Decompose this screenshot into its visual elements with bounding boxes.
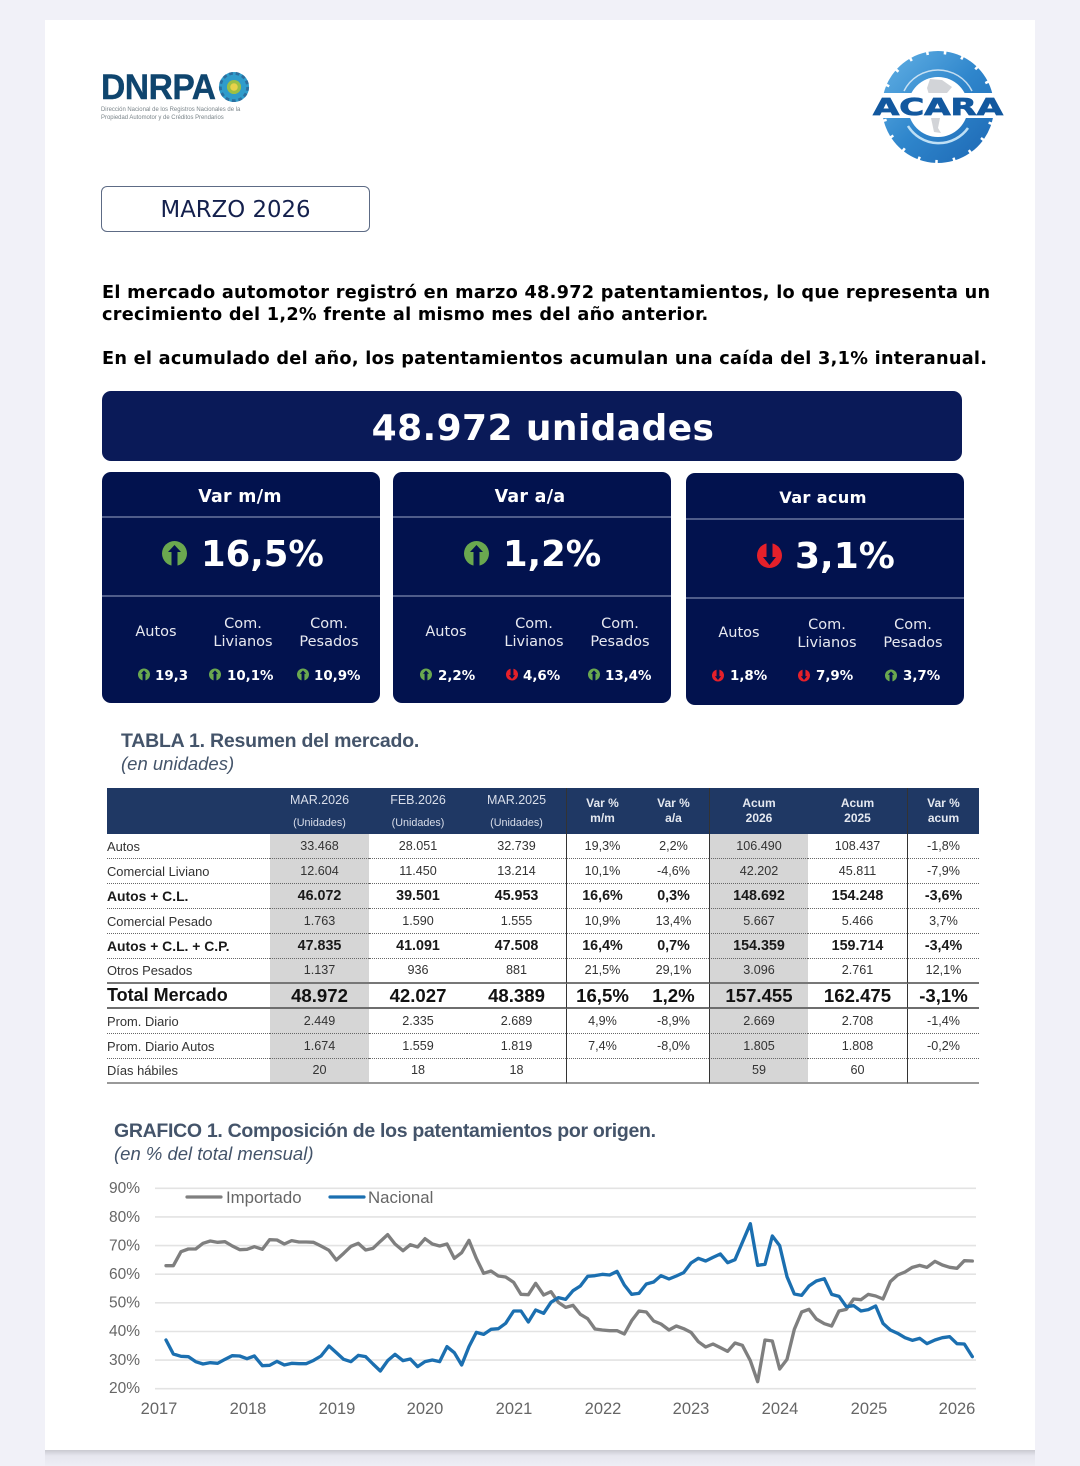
legend (187, 1188, 433, 1207)
row: Otros Pesados: 1.137 (304, 963, 335, 977)
table header: 2025 (844, 811, 871, 825)
row: Autos + C.L.: 0,3% (657, 888, 690, 904)
row: Autos + C.L. + C.P.: -3,4% (925, 938, 962, 954)
icon: up (297, 668, 309, 680)
x axis labels: 2025 (851, 1400, 887, 1418)
row: Autos + C.L.: 148.692 (733, 888, 785, 904)
row: Total Mercado: 48.389 (488, 985, 545, 1006)
main value: 3,1% (795, 536, 895, 577)
label: Autos: Autos (425, 624, 467, 640)
row: Comercial Liviano: Comercial Liviano (107, 864, 209, 878)
table header: Var % (927, 796, 960, 810)
logo: DNRPA (101, 68, 250, 121)
row: Total Mercado: 1,2% (652, 985, 695, 1006)
row: Prom. Diario Autos: 1.674 (304, 1038, 335, 1052)
row: Prom. Diario Autos: -8,0% (657, 1038, 690, 1052)
label: Com. Livianos: Livianos (504, 634, 564, 650)
intro paragraph: El mercado automotor registró en marzo 48.972 patentamientos, lo que representa un (102, 283, 990, 303)
row: Otros Pesados: 881 (506, 963, 527, 977)
row: Autos + C.L. + C.P.: Autos + C.L. + C.P. (107, 938, 229, 954)
value: livianos: 10,1% (227, 669, 273, 684)
row: Otros Pesados: 3.096 (743, 963, 775, 977)
table header: (Unidades) (293, 817, 346, 829)
x axis labels: 2020 (407, 1400, 443, 1418)
row: Otros Pesados: 2.761 (842, 963, 873, 977)
icon: up (138, 668, 150, 680)
table header: acum (928, 811, 959, 825)
banner: total units (102, 391, 962, 461)
row: Autos + C.L.: -3,6% (925, 888, 962, 904)
logo: ACARA (872, 51, 1004, 163)
value: livianos: 7,9% (816, 669, 853, 684)
main value: 16,5% (201, 534, 324, 575)
label: Com. Pesados (883, 617, 943, 650)
subheading: chart: (en % del total mensual) (114, 1143, 314, 1164)
label: Autos: Autos (135, 624, 177, 640)
row: Comercial Liviano: 11.450 (399, 864, 437, 878)
heading: chart: GRAFICO 1. Composición de los patentamientos por origen. (114, 1120, 656, 1142)
row: Prom. Diario: 2.449 (304, 1014, 335, 1028)
x axis labels (141, 1400, 975, 1418)
row: Autos: 33.468 (300, 838, 339, 852)
row: Días hábiles (107, 1059, 979, 1084)
row: Autos: 32.739 (497, 838, 536, 852)
main value icon (464, 541, 489, 566)
row: Autos (107, 834, 979, 859)
y axis labels: 70% (109, 1238, 140, 1254)
row: Autos: 106.490 (736, 838, 782, 852)
card heading: Var m/m (198, 487, 282, 507)
row: Prom. Diario Autos: 7,4% (588, 1038, 617, 1052)
row: Prom. Diario: Prom. Diario (107, 1014, 179, 1028)
table header: MAR.2025 (487, 793, 546, 807)
row: Autos + C.L.: 16,6% (582, 888, 623, 904)
row: Autos: 28.051 (399, 838, 437, 852)
row: Días hábiles: 59 (752, 1063, 766, 1077)
logo: DNRPA: Propiedad Automotor y de Créditos Prendarios (101, 115, 224, 121)
card heading: Var a/a (495, 487, 565, 507)
series: Nacional (166, 1224, 972, 1371)
row: Prom. Diario: 2.689 (501, 1014, 532, 1028)
row: Comercial Pesado: 3,7% (929, 914, 958, 928)
value: autos: 19,3 (155, 669, 188, 684)
label: Com. Livianos: Livianos (797, 634, 857, 650)
row: Comercial Liviano (107, 859, 979, 884)
table header: Var % (586, 796, 619, 810)
table header: a/a (665, 811, 682, 825)
y axis labels: 20% (109, 1380, 140, 1397)
x axis labels: 2022 (585, 1400, 621, 1418)
label: Com. Pesados: Com. (894, 617, 932, 633)
row: Días hábiles: 20 (312, 1063, 326, 1077)
label: Autos: Autos (718, 625, 760, 641)
value: autos: 2,2% (438, 669, 475, 684)
table header (107, 788, 979, 1084)
row: Autos + C.L. + C.P.: 159.714 (832, 938, 883, 954)
value: pesados: 10,9% (314, 669, 360, 684)
row: Autos + C.L. + C.P.: 16,4% (582, 938, 623, 954)
row: Prom. Diario Autos: 1.559 (402, 1038, 434, 1052)
row: Autos + C.L. + C.P.: 47.835 (298, 938, 341, 954)
row: Comercial Pesado (107, 909, 979, 934)
row: Comercial Liviano: -7,9% (927, 864, 960, 878)
row: Comercial Liviano: 13.214 (497, 864, 536, 878)
row: Prom. Diario Autos: 1.819 (501, 1038, 532, 1052)
table header: Acum (742, 796, 776, 810)
row: Días hábiles: 60 (850, 1063, 864, 1077)
row: Otros Pesados: Otros Pesados (107, 963, 192, 978)
row: Autos: 2,2% (659, 838, 688, 852)
table header: FEB.2026 (390, 793, 446, 807)
row: Autos: 19,3% (585, 838, 620, 852)
y axis labels: 80% (109, 1209, 140, 1226)
row: Comercial Pesado: 1.555 (501, 914, 532, 928)
table header: Acum (841, 796, 874, 810)
row: Comercial Liviano: 10,1% (585, 864, 620, 878)
label: Com. Pesados (299, 616, 359, 650)
row: Prom. Diario (107, 1009, 979, 1034)
table header: (Unidades) (490, 817, 543, 829)
row: Prom. Diario: -8,9% (657, 1014, 690, 1028)
x axis labels: 2018 (230, 1400, 266, 1418)
value: livianos: 4,6% (523, 669, 560, 684)
main value icon (757, 544, 782, 568)
y axis labels: 90% (109, 1180, 140, 1197)
icon: down (798, 670, 810, 682)
label: Com. Livianos: Livianos (213, 634, 273, 650)
row: Otros Pesados: 21,5% (585, 963, 620, 977)
row: Autos + C.L.: 39.501 (396, 888, 440, 904)
row: Comercial Pesado: 5.466 (842, 914, 873, 928)
label: Com. Livianos: Com. (224, 616, 262, 632)
row: Comercial Pesado: Comercial Pesado (107, 914, 212, 928)
heading: table: TABLA 1. Resumen del mercado. (121, 730, 419, 752)
row: Comercial Pesado: 1.763 (304, 914, 335, 928)
icon: up (209, 668, 221, 680)
panel: Var a/a (393, 472, 671, 703)
date badge: MARZO 2026 (161, 197, 310, 223)
row: Autos + C.L. + C.P.: 0,7% (657, 938, 690, 954)
line chart: origin share (109, 1180, 976, 1418)
card heading: Var acum (779, 488, 867, 507)
row: Prom. Diario Autos: 1.808 (842, 1038, 873, 1052)
icon: up (588, 668, 600, 680)
label: Com. Pesados: Com. (310, 616, 348, 632)
legend: Nacional (368, 1188, 433, 1207)
x axis labels: 2024 (762, 1400, 798, 1418)
intro paragraph (102, 283, 990, 325)
row: Total Mercado: 42.027 (390, 985, 446, 1006)
row: Días hábiles: Días hábiles (107, 1063, 178, 1078)
icon: down (506, 668, 518, 680)
label: Com. Pesados: Pesados (590, 634, 650, 650)
row: Otros Pesados: 29,1% (656, 963, 691, 977)
logo: DNRPA: Dirección Nacional de los Registros Nacionales de la (101, 107, 240, 113)
table header: 2026 (746, 811, 772, 825)
y axis labels: 40% (109, 1323, 140, 1340)
row: Comercial Pesado: 10,9% (585, 914, 620, 928)
label: Com. Pesados: Com. (601, 616, 639, 632)
row: Comercial Pesado: 13,4% (656, 914, 691, 928)
row: Comercial Pesado: 1.590 (402, 914, 434, 928)
row: Otros Pesados: 936 (407, 963, 428, 977)
icon: down (712, 670, 724, 682)
value: pesados: 3,7% (903, 669, 940, 684)
row: Autos + C.L. + C.P.: 154.359 (733, 938, 785, 954)
y axis labels: 30% (109, 1352, 140, 1369)
panel: Var acum (686, 473, 964, 705)
table header: (Unidades) (392, 817, 444, 829)
row: Prom. Diario Autos: 1.805 (743, 1038, 775, 1052)
row: Total Mercado: Total Mercado (107, 985, 228, 1005)
value: pesados: 13,4% (605, 669, 651, 684)
row: Días hábiles: 18 (411, 1063, 425, 1077)
row: Autos + C.L. + C.P.: 47.508 (495, 938, 538, 954)
row: Total Mercado: 48.972 (291, 985, 348, 1006)
row: Total Mercado: 157.455 (725, 985, 793, 1006)
row: Total Mercado: 16,5% (576, 985, 629, 1006)
row: Comercial Liviano: 45.811 (839, 864, 876, 878)
value: autos: 1,8% (730, 669, 767, 684)
row: Autos: 108.437 (835, 838, 880, 852)
x axis labels: 2026 (939, 1400, 975, 1418)
row: Total Mercado: -3,1% (919, 985, 968, 1006)
label: Com. Pesados: Pesados (883, 634, 943, 650)
row: Comercial Liviano: -4,6% (657, 864, 690, 878)
table header: MAR.2026 (290, 793, 349, 807)
label: Com. Livianos: Com. (808, 617, 846, 633)
table header: m/m (590, 811, 615, 825)
label: Com. Livianos (797, 617, 857, 650)
row: Autos + C.L.: 45.953 (495, 888, 538, 904)
x axis labels: 2021 (496, 1400, 532, 1418)
row: Prom. Diario Autos: Prom. Diario Autos (107, 1038, 214, 1054)
row: Otros Pesados (107, 959, 979, 984)
row: Autos + C.L. + C.P.: 41.091 (396, 938, 440, 954)
x axis labels: 2017 (141, 1400, 177, 1418)
row: Prom. Diario: 2.669 (743, 1014, 775, 1028)
row: Prom. Diario: -1,4% (927, 1014, 960, 1028)
subheading: table: (en unidades) (121, 753, 234, 774)
row: Comercial Liviano: 12.604 (300, 864, 339, 878)
main value: 1,2% (503, 534, 601, 575)
row: Comercial Liviano: 42.202 (740, 864, 778, 878)
y axis labels: 50% (109, 1294, 140, 1312)
row: Otros Pesados: 12,1% (926, 963, 961, 977)
x axis labels: 2023 (673, 1400, 709, 1418)
table header: Var % (657, 796, 690, 810)
label: Com. Pesados (590, 616, 650, 650)
main value icon (162, 541, 187, 566)
series: Importado (166, 1235, 972, 1382)
row: Autos + C.L. + C.P. (107, 934, 979, 959)
y axis labels: 60% (109, 1266, 140, 1283)
row: Autos + C.L. (107, 884, 979, 909)
row: Autos: -1,8% (927, 838, 960, 852)
x axis labels: 2019 (319, 1400, 355, 1418)
row: Autos + C.L.: Autos + C.L. (107, 888, 188, 904)
row: Total Mercado: 162.475 (824, 985, 891, 1006)
row: Prom. Diario Autos: -0,2% (927, 1038, 960, 1052)
icon: up (420, 668, 432, 680)
intro paragraph: crecimiento del 1,2% frente al mismo mes del año anterior. (102, 305, 709, 325)
accumulated paragraph: En el acumulado del año, los patentamientos acumulan una caída del 3,1% interanual. (102, 349, 987, 369)
logo: ACARA: ACARA (873, 93, 1004, 121)
row: Autos + C.L.: 154.248 (832, 888, 883, 904)
row: Prom. Diario: 4,9% (588, 1014, 617, 1028)
icon: up (885, 670, 897, 682)
label: Com. Pesados: Pesados (299, 634, 359, 650)
row: Comercial Pesado: 5.667 (743, 914, 775, 928)
date badge (101, 186, 370, 232)
row: Prom. Diario Autos (107, 1034, 979, 1059)
label: Com. Livianos (213, 616, 273, 650)
row: Total Mercado (107, 984, 979, 1009)
row: Prom. Diario: 2.335 (402, 1014, 434, 1028)
banner: total units: 48.972 unidades (372, 408, 714, 449)
sheet bottom shadow (45, 1450, 1035, 1466)
label: Com. Livianos: Com. (515, 616, 553, 632)
panel: Var m/m (102, 472, 380, 703)
y axis labels (109, 1180, 140, 1397)
row: Prom. Diario: 2.708 (842, 1014, 873, 1028)
logo: DNRPA: DNRPA (101, 68, 216, 107)
row: Autos: Autos (107, 838, 140, 854)
legend: Importado (226, 1188, 302, 1207)
row: Autos + C.L.: 46.072 (298, 888, 341, 904)
table: market summary (107, 788, 979, 1084)
label: Com. Livianos (504, 616, 564, 650)
row: Días hábiles: 18 (509, 1063, 524, 1077)
